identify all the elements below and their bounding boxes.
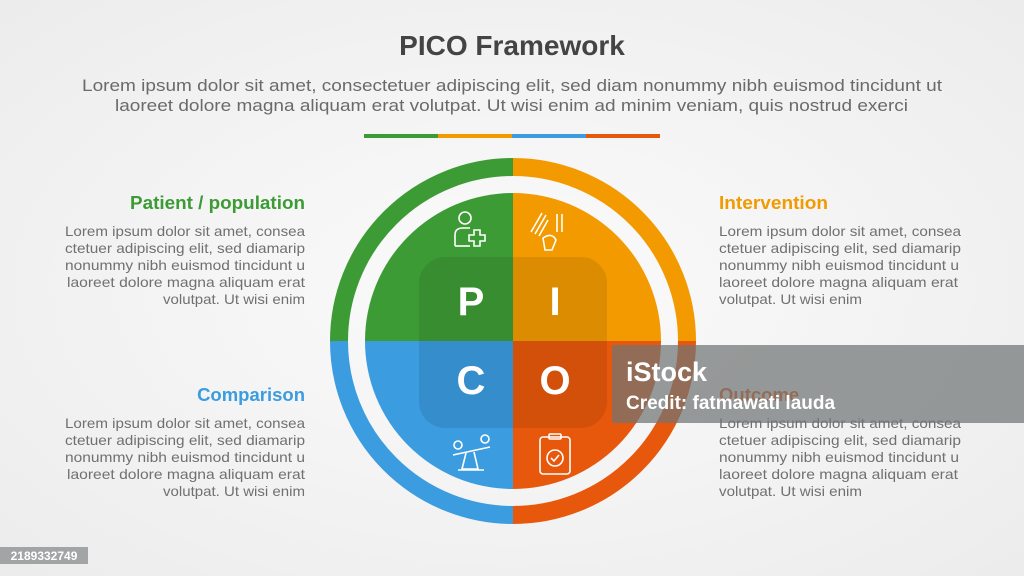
text: outcome: Lorem ipsum dolor sit amet, consea xyxy=(719,415,961,431)
text: patient: ctetuer adipiscing elit, sed diamarip xyxy=(65,240,305,256)
letters: C xyxy=(457,359,485,403)
text: patient xyxy=(65,192,305,307)
text: patient: volutpat. Ut wisi enim xyxy=(163,291,305,307)
letters: O xyxy=(539,359,571,403)
text: patient: nonummy nibh euismod tincidunt u xyxy=(65,257,305,273)
text: outcome xyxy=(719,384,961,499)
text: comparison: laoreet dolore magna aliquam erat xyxy=(67,466,305,482)
outer ring xyxy=(339,167,687,515)
icon: clipboard xyxy=(540,434,570,474)
text: comparison: ctetuer adipiscing elit, sed diamarip xyxy=(65,432,305,448)
letters xyxy=(457,280,571,403)
icon: seesaw xyxy=(453,435,490,470)
watermark banner: iStock xyxy=(626,357,708,387)
text: outcome: volutpat. Ut wisi enim xyxy=(719,483,862,499)
title: PICO Framework xyxy=(399,30,625,61)
text: patient: Lorem ipsum dolor sit amet, consea xyxy=(65,223,305,239)
text: intervention: ctetuer adipiscing elit, sed diamarip xyxy=(719,240,961,256)
letters: P xyxy=(458,280,484,324)
color bar xyxy=(364,134,660,138)
text: outcome: Outcome xyxy=(719,384,799,405)
text: comparison: nonummy nibh euismod tincidunt u xyxy=(65,449,305,465)
subtitle: laoreet dolore magna aliquam erat volutpat. Ut wisi enim ad minim veniam, quis nostrud exerci xyxy=(115,96,908,115)
text: intervention: Lorem ipsum dolor sit amet, consea xyxy=(719,223,961,239)
PICO circle xyxy=(365,193,661,489)
watermark banner: Credit: fatmawati lauda xyxy=(626,393,835,414)
text: patient: laoreet dolore magna aliquam erat xyxy=(67,274,305,290)
text: outcome: laoreet dolore magna aliquam erat xyxy=(719,466,958,482)
text: comparison: Lorem ipsum dolor sit amet, consea xyxy=(65,415,305,431)
watermark banner xyxy=(612,345,1024,423)
id label xyxy=(0,547,88,564)
text: intervention: nonummy nibh euismod tincidunt u xyxy=(719,257,959,273)
id label: 2189332749 xyxy=(11,549,78,563)
text: patient: Patient / population xyxy=(130,192,305,213)
subtitle xyxy=(82,76,942,115)
text: comparison: Comparison xyxy=(197,384,305,405)
text: comparison xyxy=(65,384,305,499)
text: intervention: laoreet dolore magna aliquam erat xyxy=(719,274,958,290)
text: intervention: volutpat. Ut wisi enim xyxy=(719,291,862,307)
text: outcome: nonummy nibh euismod tincidunt u xyxy=(719,449,959,465)
subtitle: Lorem ipsum dolor sit amet, consectetuer adipiscing elit, sed diam nonummy nibh euismod tincidunt ut xyxy=(82,76,942,95)
icon: patient plus xyxy=(455,212,485,246)
text: comparison: volutpat. Ut wisi enim xyxy=(163,483,305,499)
letters: I xyxy=(549,280,561,324)
text: intervention: Intervention xyxy=(719,192,828,213)
icon: hand xyxy=(531,213,562,250)
text: outcome: ctetuer adipiscing elit, sed diamarip xyxy=(719,432,961,448)
text: intervention xyxy=(719,192,961,307)
